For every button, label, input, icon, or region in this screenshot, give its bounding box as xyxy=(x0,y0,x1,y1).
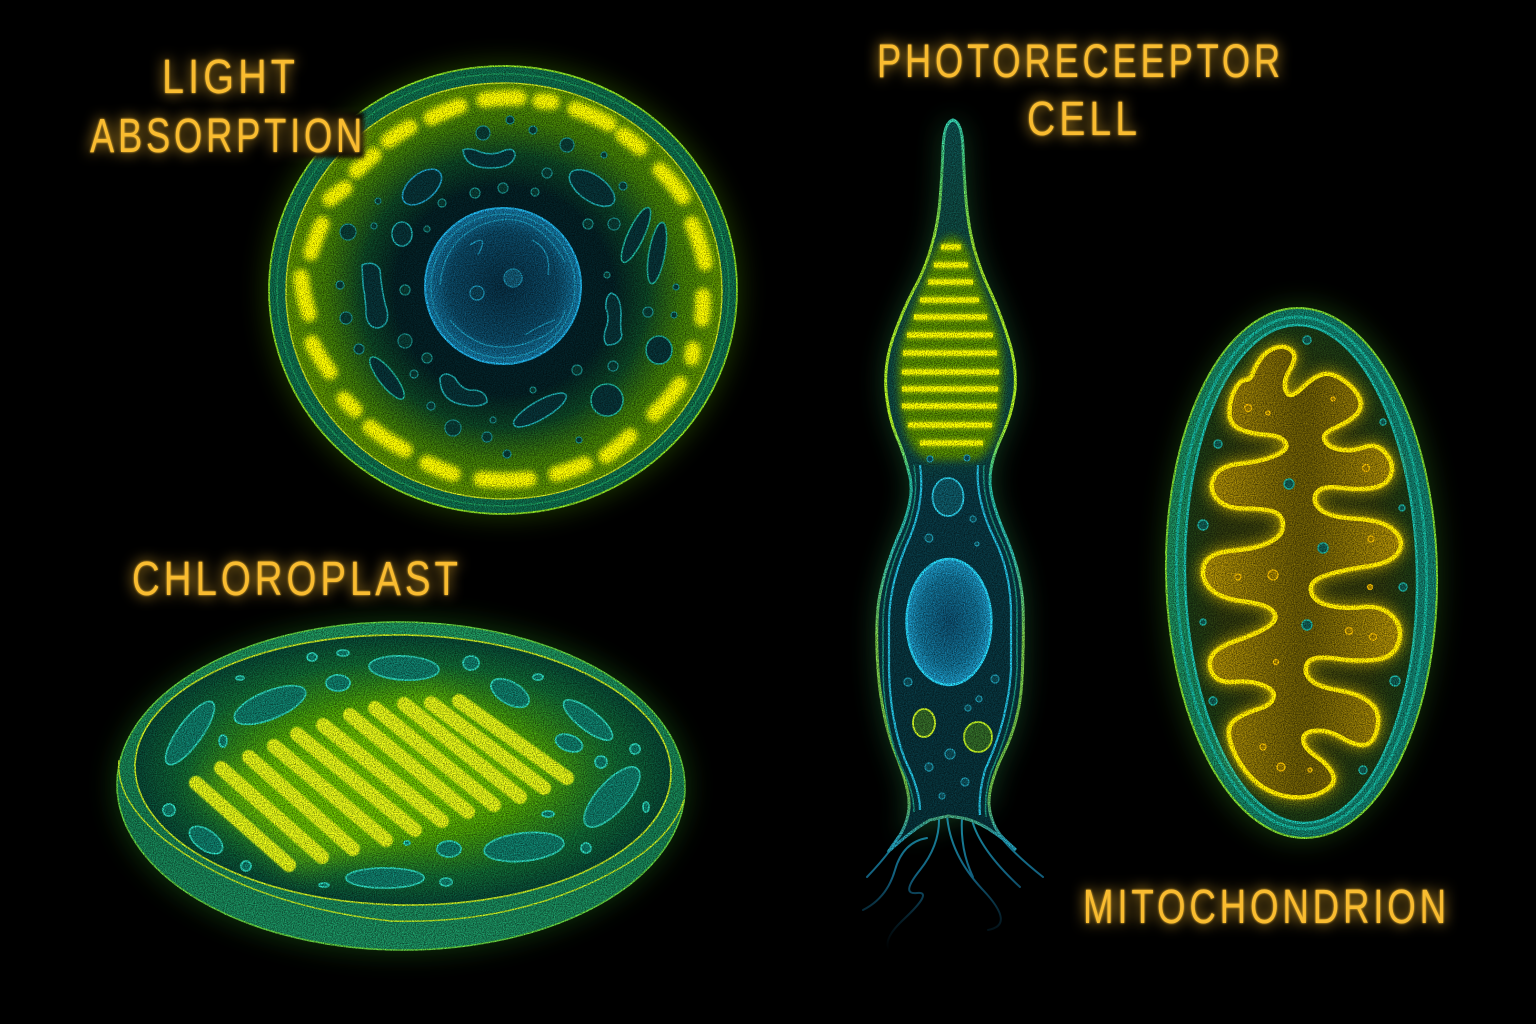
membrane band lines xyxy=(883,465,1017,817)
panel: mitochondrion xyxy=(1161,306,1442,840)
inner membrane lines xyxy=(889,465,1011,815)
label: light: LIGHT xyxy=(162,51,299,104)
olive outer segment xyxy=(898,236,1003,460)
mitochondrion body xyxy=(1161,306,1442,840)
label: absorption: ABSORPTION xyxy=(90,110,366,163)
dark halo behind absorption label xyxy=(92,112,364,158)
cell outer glow xyxy=(267,64,739,516)
chloroplast body xyxy=(116,620,686,952)
teal matrix granules xyxy=(1198,336,1407,774)
photoreceptor glow xyxy=(877,120,1023,835)
cell wall inner line xyxy=(277,74,729,506)
green organelle left xyxy=(913,709,935,737)
thylakoid stripes xyxy=(196,701,567,865)
panel: light absorption cell xyxy=(267,64,739,516)
yellow light absorbing ring segments xyxy=(301,98,705,480)
roots xyxy=(863,815,1043,960)
label: cell: CELL xyxy=(1027,93,1141,146)
small nucleolus xyxy=(470,286,484,300)
matrix xyxy=(1181,323,1421,825)
label: photoreceptor: PHOTORECEEPTOR xyxy=(877,34,1284,87)
cell wall band xyxy=(269,66,737,514)
label: chloroplast: CHLOROPLAST xyxy=(132,553,462,606)
small vesicles xyxy=(904,455,999,799)
cell cytoplasm xyxy=(286,83,722,499)
stacked membrane discs xyxy=(902,247,999,443)
nucleus inner folds xyxy=(431,214,575,358)
green organelle right xyxy=(964,722,992,752)
organelles xyxy=(362,149,672,433)
chloroplast stroma xyxy=(133,630,673,910)
chloroplast organelles xyxy=(158,650,649,888)
photoreceptor nucleus xyxy=(906,559,992,685)
vacuole xyxy=(932,478,964,516)
diagonal bright band xyxy=(195,690,570,870)
gold matrix granules xyxy=(1235,397,1376,772)
nucleus xyxy=(425,208,581,364)
rim middle line xyxy=(1172,315,1431,831)
lower membrane line xyxy=(119,760,684,921)
panel: photoreceptor cell xyxy=(863,120,1043,960)
chloroplast rim xyxy=(116,620,686,952)
nucleolus xyxy=(504,269,522,287)
small vesicles xyxy=(336,116,679,458)
cristae inner membrane xyxy=(1203,347,1401,797)
outer membrane xyxy=(1161,306,1442,840)
cell body xyxy=(269,66,737,514)
chloroplast glow xyxy=(115,620,687,952)
panel: chloroplast xyxy=(115,620,687,952)
mitochondrion glow xyxy=(1164,306,1438,840)
cell membrane xyxy=(877,120,1023,852)
nucleus membrane xyxy=(425,208,581,364)
photoreceptor body xyxy=(877,120,1023,852)
